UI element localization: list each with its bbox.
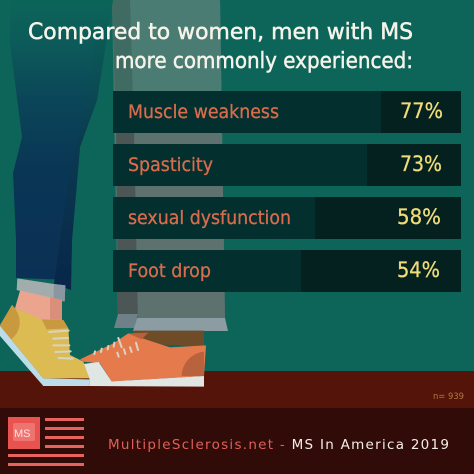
bar: sexual dysfunction 58%: 58% bbox=[397, 205, 441, 229]
illustration: grey trouser leg bbox=[112, 0, 228, 331]
footer band bbox=[0, 408, 474, 474]
background wall bbox=[0, 0, 474, 372]
jeans cuff bbox=[17, 278, 65, 301]
title: more commonly experienced: bbox=[115, 49, 413, 74]
illustration: feet and sneakers bbox=[0, 278, 206, 387]
orange sneaker sole bbox=[83, 362, 204, 387]
bar: foot drop 54%: Foot drop bbox=[128, 260, 211, 282]
bar: foot drop 54% bbox=[113, 250, 461, 292]
bar: spasticity 73%: Spasticity bbox=[128, 154, 213, 176]
bar: sexual dysfunction 58%: sexual dysfunction bbox=[128, 207, 291, 229]
illustration: blue jeans leg bbox=[10, 0, 113, 290]
yellow sneaker sole bbox=[0, 326, 89, 386]
bar: muscle weakness 77%: 77% bbox=[400, 99, 443, 123]
bar: muscle weakness 77% bbox=[113, 91, 461, 133]
bar: foot drop 54%: 54% bbox=[397, 258, 440, 282]
bar: spasticity 73%: 73% bbox=[400, 152, 442, 176]
logo: MS flag bbox=[8, 417, 84, 466]
bar: muscle weakness 77%: Muscle weakness bbox=[128, 101, 279, 123]
bar: spasticity 73% bbox=[113, 144, 461, 186]
title bbox=[28, 20, 413, 74]
yellow sneaker bbox=[0, 305, 89, 378]
yellow sneaker laces bbox=[49, 331, 73, 359]
bar: sexual dysfunction 58% bbox=[113, 197, 461, 239]
title: Compared to women, men with MS bbox=[28, 20, 413, 45]
footer text: MultipleSclerosis.net - MS In America 2019 bbox=[108, 437, 449, 453]
sample size note: n= 939 bbox=[433, 392, 464, 402]
floor bbox=[0, 371, 474, 409]
brown ankle of right foot bbox=[133, 331, 204, 347]
orange sneaker laces bbox=[94, 338, 138, 357]
orange sneaker bbox=[80, 333, 206, 381]
ankle bbox=[15, 291, 62, 320]
logo: MS flag: MS bbox=[14, 428, 30, 440]
